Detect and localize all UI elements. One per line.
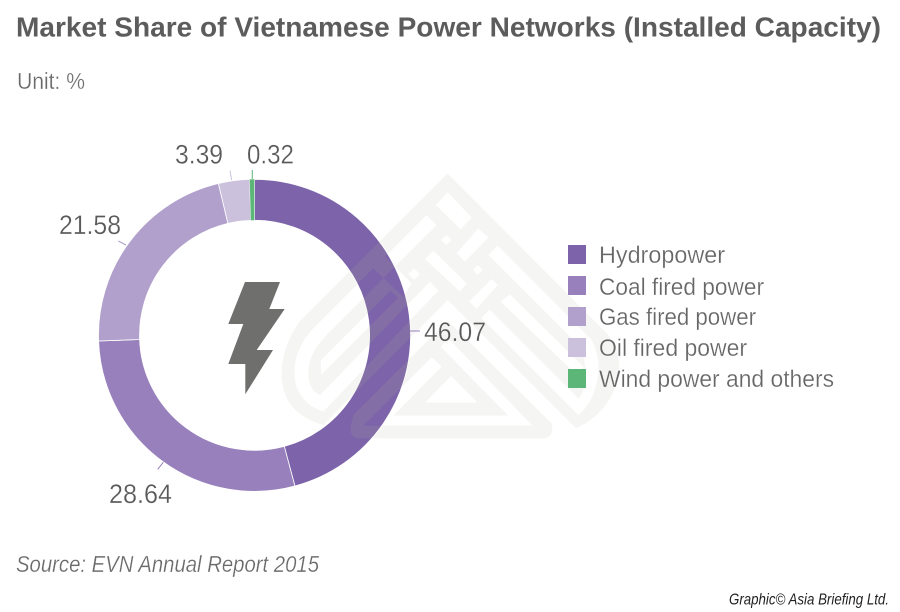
segment: wind 0.32 (250, 179, 254, 220)
donut chart (98, 179, 411, 491)
segment: hydropower 46.07 (254, 179, 411, 486)
legend item: coal: Coal fired power (599, 274, 764, 301)
source note: Source: EVN Annual Report 2015 (16, 551, 320, 577)
value: gas: 21.58 (59, 210, 121, 240)
segment: gas 21.58 (98, 184, 228, 341)
legend (568, 242, 834, 393)
value: wind: 0.32 (247, 140, 294, 170)
watermark logo (282, 173, 619, 438)
title: Market Share of Vietnamese Power Networks (Installed Capacity) (16, 12, 881, 42)
value labels (59, 140, 486, 509)
legend item: wind: Wind power and others (599, 366, 834, 393)
legend item: oil: Oil fired power (599, 335, 747, 362)
label leader lines (118, 170, 420, 469)
icon: lightning bolt (228, 282, 285, 394)
value: coal: 28.64 (109, 479, 172, 509)
legend item: hydropower: Hydropower (599, 242, 725, 269)
value: hydropower: 46.07 (424, 317, 486, 347)
segment: oil 3.39 (218, 179, 251, 223)
segment: coal 28.64 (99, 340, 295, 491)
legend item: gas: Gas fired power (599, 304, 756, 331)
watermark overlay on donut (350, 242, 410, 438)
unit label: Unit: % (17, 68, 85, 94)
value: oil: 3.39 (175, 140, 223, 170)
